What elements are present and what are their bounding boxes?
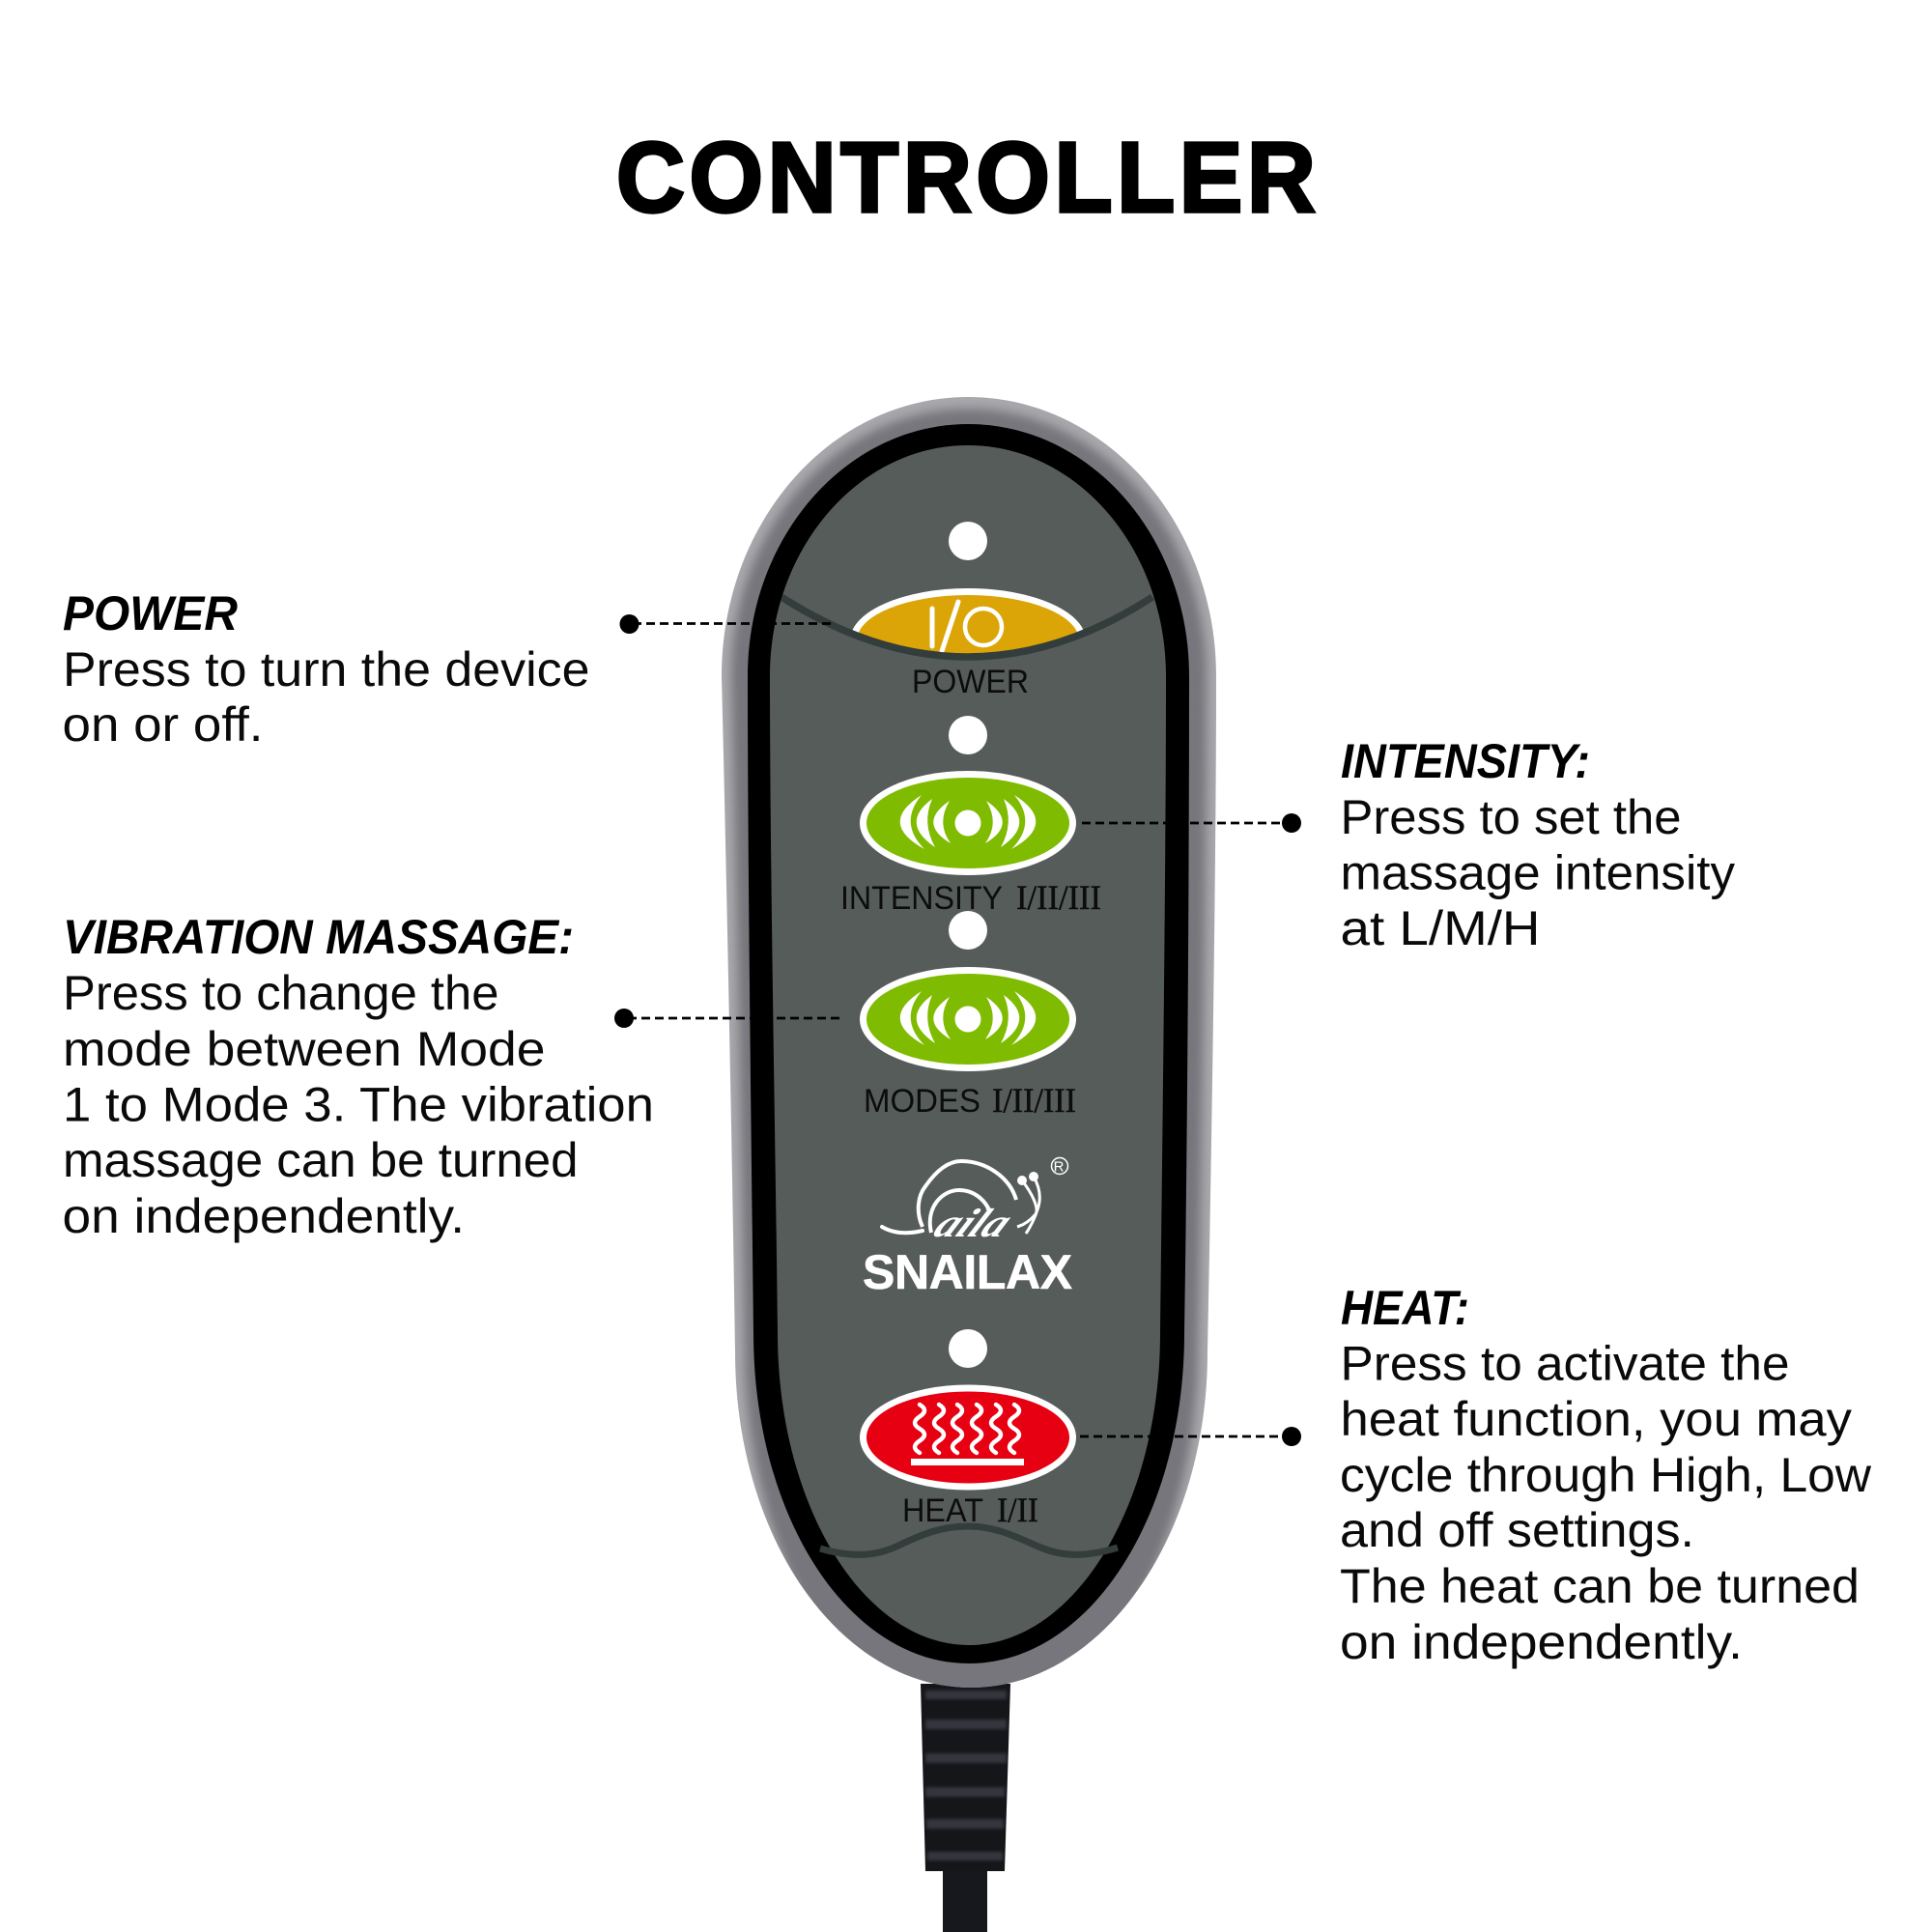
text block: intensity [1341,734,1735,955]
label: intensity [840,878,1101,917]
text block: heat: HEAT: [1341,1281,1469,1335]
text block: power: on or off. [62,697,263,752]
label: intensity: I/II/III [1016,878,1101,917]
label: heat: I/II [997,1491,1038,1529]
strain relief [918,1684,1014,1871]
text block: heat [1340,1281,1872,1669]
text block: heat: cycle through High, Low [1340,1448,1872,1502]
label: intensity: INTENSITY [840,880,1003,917]
label: modes: I/II/III [992,1081,1076,1120]
text block: vibration massage: massage can be turned [63,1133,578,1187]
dark grey face [770,445,1166,1645]
text block: power [62,586,589,752]
cable and strain relief [918,1684,1014,1932]
black inner ring [748,424,1189,1663]
text block: vibration massage: on independently. [62,1189,465,1243]
heat button [860,1385,1076,1490]
text block: vibration massage: mode between Mode [63,1022,545,1076]
text block: intensity: massage intensity [1341,846,1735,900]
text block: vibration massage: VIBRATION MASSAGE: [63,910,574,964]
callout line: power [620,614,835,634]
label: heat: HEAT [902,1492,983,1529]
indicator light: intensity [949,716,987,754]
text block: intensity: at L/M/H [1341,901,1540,955]
text block: heat: Press to activate the [1341,1337,1789,1391]
text block: intensity: Press to set the [1341,790,1681,844]
callout line: heat [1080,1427,1301,1446]
modes button [860,967,1076,1071]
text block: power: Press to turn the device [63,642,589,696]
text block: vibration massage [62,910,654,1243]
label: power: POWER [912,664,1029,700]
power button [852,588,1084,653]
text block: heat: The heat can be turned [1340,1559,1860,1613]
text block: intensity: INTENSITY: [1341,734,1590,788]
label: heat [902,1491,1038,1529]
logo: snail [882,1157,1068,1245]
label: modes [864,1081,1076,1120]
text block: heat: heat function, you may [1341,1392,1852,1446]
logo: brand name: SNAILAX [863,1245,1072,1299]
indicator light: heat [949,1329,987,1368]
intensity button [860,771,1076,875]
text block: vibration massage: Press to change the [63,966,498,1020]
callout line: intensity [1082,813,1301,833]
callout line: vibration massage [614,1009,842,1028]
upper face seam [781,597,1152,657]
cable [943,1864,987,1932]
controller body [722,397,1216,1729]
text block: heat: on independently. [1340,1615,1743,1669]
text block: vibration massage: 1 to Mode 3. The vibration [63,1078,654,1132]
indicator light: power [949,522,987,560]
logo: snail: aila [926,1201,1021,1245]
text block: heat: and off settings. [1340,1503,1694,1557]
title: CONTROLLER [616,123,1316,234]
logo: snail: R [1054,1159,1065,1175]
text block: power: POWER [63,586,238,640]
indicator light: modes [949,911,987,950]
lower face seam [820,1526,1118,1554]
outer grey shell [722,397,1216,1729]
label: modes: MODES [864,1083,980,1120]
